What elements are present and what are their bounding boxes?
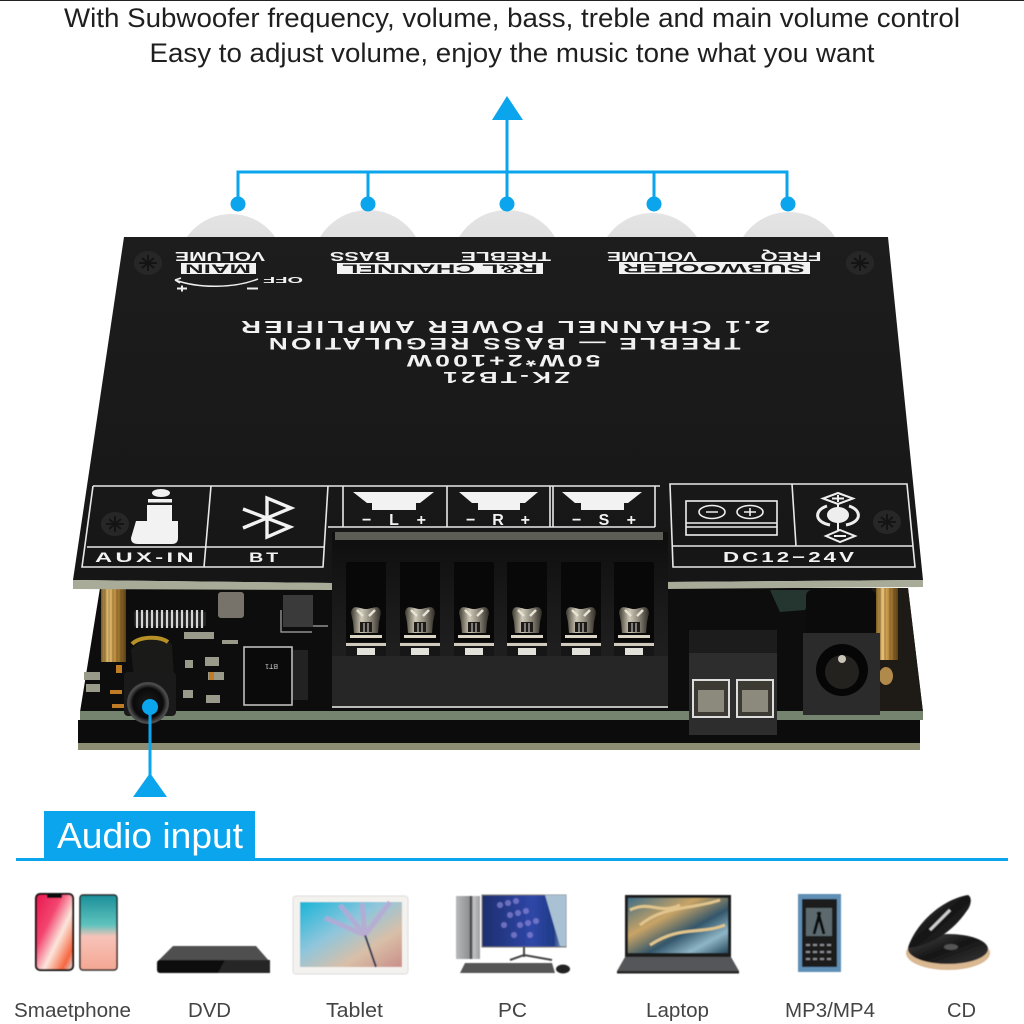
audio input callout xyxy=(44,699,255,858)
speaker output labels: −R+ xyxy=(466,512,530,529)
icon: DC polarity xyxy=(818,493,858,542)
printed knob labels (upside down): TREBLE xyxy=(461,249,551,263)
device labels: DVD xyxy=(188,1000,231,1022)
printed model text (upside down): 2.1 CHANNEL POWER AMPLIFIER xyxy=(238,317,770,337)
device: smartphones xyxy=(36,894,117,970)
gold standoff posts xyxy=(101,588,898,685)
device: desktop PC xyxy=(456,895,570,974)
printed knob labels (upside down): OFF xyxy=(263,275,303,284)
printed knob labels (upside down): R&L CHANNEL xyxy=(342,262,538,274)
printed model text (upside down) xyxy=(238,317,770,385)
device labels: Smaetphone xyxy=(14,1000,131,1022)
upper board with printed panel xyxy=(73,237,923,590)
divider xyxy=(16,858,1008,861)
device: MP3 player xyxy=(798,894,841,972)
control callout connector and arrow xyxy=(230,96,796,212)
printed model text (upside down): ZK-TB21 xyxy=(440,368,570,385)
DC barrel jack xyxy=(803,590,880,715)
device labels: MP3/MP4 xyxy=(785,1000,875,1022)
printed label: AUX-IN: AUX-IN xyxy=(95,549,197,565)
control knobs behind board xyxy=(177,210,844,322)
power terminal connector xyxy=(689,630,777,735)
printed knob labels (upside down): VOLUME xyxy=(175,249,265,263)
circuit components xyxy=(84,590,815,708)
icon: screw terminal power xyxy=(686,501,777,535)
printed knob labels (upside down) xyxy=(175,249,822,292)
printed model text (upside down): TREBLE — BASS REGULATION xyxy=(266,334,740,352)
device: portable CD player xyxy=(906,895,990,970)
printed knob labels (upside down): FREQ xyxy=(760,249,822,263)
printed knob labels (upside down): MAIN xyxy=(185,262,251,274)
top edge rule xyxy=(0,0,1024,1)
header text xyxy=(64,3,960,68)
printed knob labels (upside down): BASS xyxy=(330,249,390,263)
speaker output labels: −L+ xyxy=(362,512,426,529)
speaker output labels xyxy=(362,512,636,529)
header text: With Subwoofer frequency, volume, bass, treble and main volume control xyxy=(64,3,960,33)
audio input jack xyxy=(124,672,176,723)
mounting screws xyxy=(101,251,901,536)
printed label: BT: BT xyxy=(249,549,281,565)
device labels: PC xyxy=(498,1000,527,1022)
printed connector frame: aux and bluetooth xyxy=(82,486,660,567)
device: DVD player xyxy=(157,946,270,973)
speaker screw terminal block xyxy=(332,532,668,708)
device labels: Laptop xyxy=(646,1000,709,1022)
circuit components: BT1 xyxy=(265,662,278,669)
printed knob labels (upside down): SUBWOOFER xyxy=(621,261,805,273)
device labels: CD xyxy=(947,1000,976,1022)
audio input callout: Audio input xyxy=(57,815,243,856)
printed connector frame: power xyxy=(670,484,915,567)
icons: speaker outputs xyxy=(353,492,642,510)
icon: bluetooth xyxy=(243,498,291,537)
printed knob labels (upside down): VOLUME xyxy=(607,249,697,263)
printed model text (upside down): 50W*2+100W xyxy=(404,351,600,369)
device labels: Tablet xyxy=(326,1000,383,1022)
icon: audio jack xyxy=(131,489,178,544)
lower amplifier board xyxy=(78,588,923,750)
header text: Easy to adjust volume, enjoy the music tone what you want xyxy=(150,38,875,68)
device: laptop xyxy=(617,895,739,974)
device labels xyxy=(14,1000,976,1022)
speaker output labels: −S+ xyxy=(572,512,636,529)
device: tablet xyxy=(293,896,408,974)
printed label: DC12-24V: DC12−24V xyxy=(723,550,857,566)
